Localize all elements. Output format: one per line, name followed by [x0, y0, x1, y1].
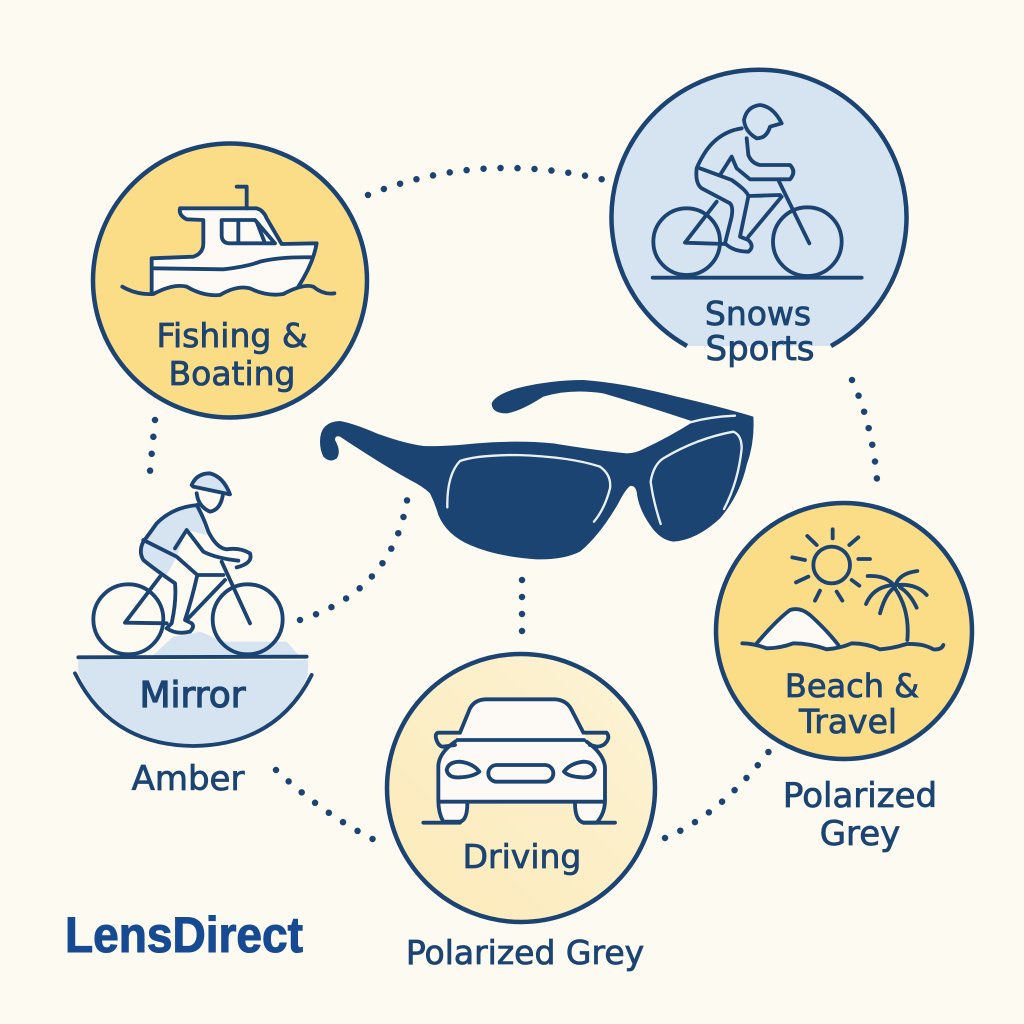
label: travel: Travel [798, 702, 897, 741]
icon: cyclist [653, 105, 862, 278]
panel: beach and travel [716, 503, 972, 759]
label: polarized grey bottom: Polarized Grey [406, 933, 644, 972]
label: beach: Beach & [785, 667, 919, 705]
icon: car [423, 699, 615, 823]
label: grey: Grey [820, 814, 900, 854]
label: polarized grey right: Polarized [783, 776, 937, 816]
label: snows: Snows [705, 294, 811, 333]
sunglasses [320, 380, 754, 559]
icon: cyclist on hill [75, 473, 312, 746]
logo: LensDirect [65, 907, 303, 963]
icon: boat [122, 187, 334, 295]
label: boating: Boating [168, 354, 296, 393]
panel: fishing and boating [93, 144, 367, 418]
label: amber: Amber [132, 759, 244, 799]
icon: beach [742, 529, 943, 649]
label: driving: Driving [463, 837, 581, 876]
label: mirror: Mirror [139, 675, 246, 716]
panel: driving [387, 654, 655, 922]
label: fishing: Fishing & [156, 316, 308, 355]
panel: snow sports [612, 70, 906, 369]
label: sports: Sports [706, 329, 814, 369]
panel: mirror [75, 473, 312, 746]
dotted connectors [149, 168, 878, 845]
